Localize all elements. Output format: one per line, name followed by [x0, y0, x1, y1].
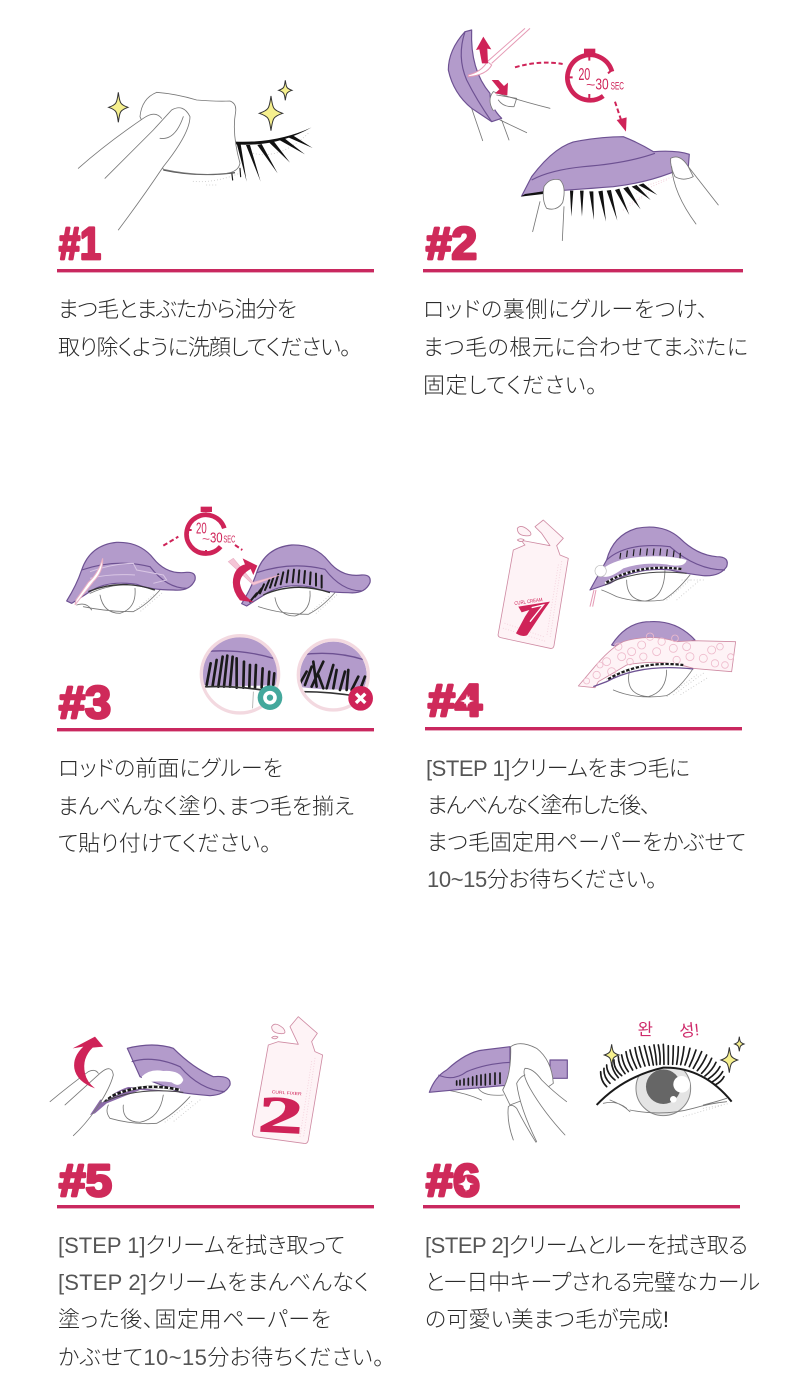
- text block: [STEP 1]クリームをまつ毛に: [426, 756, 690, 781]
- text block: 10~15分お待ちください。: [427, 867, 657, 892]
- correct example: [203, 637, 277, 708]
- korean caption: 성!: [678, 1020, 700, 1041]
- pouch: curl cream 1: CURL CREAM: [514, 597, 543, 607]
- badge: correct: [258, 685, 282, 710]
- hand with cotton: [50, 1047, 142, 1136]
- left eye with rod: [67, 542, 195, 613]
- text block: [58, 1233, 384, 1370]
- incorrect example: [300, 642, 366, 696]
- heading: #1: #1: [59, 218, 101, 269]
- korean caption: [638, 1020, 700, 1041]
- pouch: curl fixer 2: [252, 1017, 323, 1146]
- text block: ロッドの前面にグルーを: [58, 756, 283, 781]
- illustration: applying glue to rod and fixing on eyelid: [448, 28, 718, 241]
- badge: incorrect: [348, 686, 373, 711]
- divider rule: [425, 727, 742, 730]
- text block: [426, 756, 746, 892]
- right eye with rod and lashes: [228, 545, 370, 616]
- text block: [425, 1233, 760, 1332]
- pouch: curl fixer 2: 2: [257, 1086, 305, 1146]
- text block: まつ毛の根元に合わせてまぶたに: [423, 335, 748, 360]
- panel: step 6: [423, 1020, 760, 1332]
- text block: まつ毛とまぶたから油分を: [58, 297, 297, 322]
- stopwatch 20-30 sec: [187, 507, 235, 554]
- text block: まんべんなく塗布した後、: [427, 793, 651, 818]
- pouch: curl fixer 2: CURL FIXER: [272, 1089, 302, 1096]
- rod and cream: [127, 1045, 230, 1096]
- finished eye: [597, 1020, 744, 1117]
- stopwatch 20-30 sec: SEC: [611, 81, 624, 93]
- text block: [STEP 2]クリームとルーを拭き取る: [425, 1233, 748, 1258]
- panel: step 3: [57, 507, 374, 856]
- illustration: glue on rod, attach lashes, correct vs incorrect: [67, 507, 373, 715]
- pouch: curl cream 1: [498, 520, 568, 648]
- text block: ロッドの裏側にグルーをつけ、: [423, 297, 708, 322]
- illustration: fingers wiping eyelid with cotton pad: [78, 80, 313, 230]
- text block: かぶせて10~15分お待ちください。: [58, 1345, 384, 1370]
- text block: [STEP 1]クリームを拭き取って: [58, 1233, 345, 1258]
- heading: #5: #5: [59, 1155, 112, 1206]
- eye with fixing paper: [578, 622, 736, 697]
- panel: step 2: [423, 28, 748, 398]
- divider rule: [423, 269, 743, 272]
- illustration: curl cream pouch and fixing paper: [498, 520, 736, 697]
- text block: の可愛い美まつ毛が完成!: [425, 1307, 669, 1332]
- text block: [423, 297, 748, 398]
- panel: step 4: [425, 520, 746, 892]
- eye with rod and cream: [590, 527, 727, 607]
- text block: まんべんなく塗り、まつ毛を揃え: [58, 794, 354, 819]
- stopwatch 20-30 sec: ~: [586, 78, 595, 92]
- stopwatch 20-30 sec: ~: [202, 533, 210, 545]
- divider rule: [57, 1205, 374, 1208]
- korean caption: 완: [638, 1020, 653, 1039]
- stopwatch 20-30 sec: 30: [595, 77, 609, 94]
- panel: step 1: [57, 80, 374, 360]
- heading: #6: #6: [426, 1155, 480, 1206]
- text block: まつ毛固定用ペーパーをかぶせて: [427, 830, 746, 855]
- rod and hand: [429, 1044, 567, 1142]
- heading: #3: #3: [59, 677, 111, 728]
- divider rule: [57, 728, 374, 731]
- text block: て貼り付けてください。: [58, 831, 271, 856]
- stopwatch 20-30 sec: 20: [578, 64, 590, 84]
- stopwatch 20-30 sec: 30: [210, 531, 223, 547]
- text block: [58, 756, 354, 856]
- heading: #2: #2: [426, 218, 477, 269]
- divider rule: [423, 1205, 740, 1208]
- stopwatch 20-30 sec: 20: [196, 520, 207, 537]
- text block: [58, 297, 351, 360]
- arrow: [73, 1037, 103, 1088]
- text block: 取り除くように洗顔してください。: [58, 335, 351, 360]
- panel: step 5: [50, 1017, 384, 1370]
- text block: 固定してください。: [423, 373, 597, 398]
- text block: [STEP 2]クリームをまんべんなく: [58, 1270, 369, 1295]
- stopwatch 20-30 sec: [567, 49, 624, 100]
- heading: #4: #4: [428, 675, 482, 726]
- illustration: wiping cream and finished curled lashes: [429, 1020, 744, 1142]
- illustration: wiping cream and fixer pouch 2: [50, 1017, 323, 1146]
- divider rule: [57, 269, 374, 272]
- stopwatch 20-30 sec: SEC: [223, 535, 235, 546]
- text block: 塗った後、固定用ペーパーを: [58, 1307, 331, 1332]
- text block: と一日中キープされる完璧なカール: [425, 1270, 760, 1295]
